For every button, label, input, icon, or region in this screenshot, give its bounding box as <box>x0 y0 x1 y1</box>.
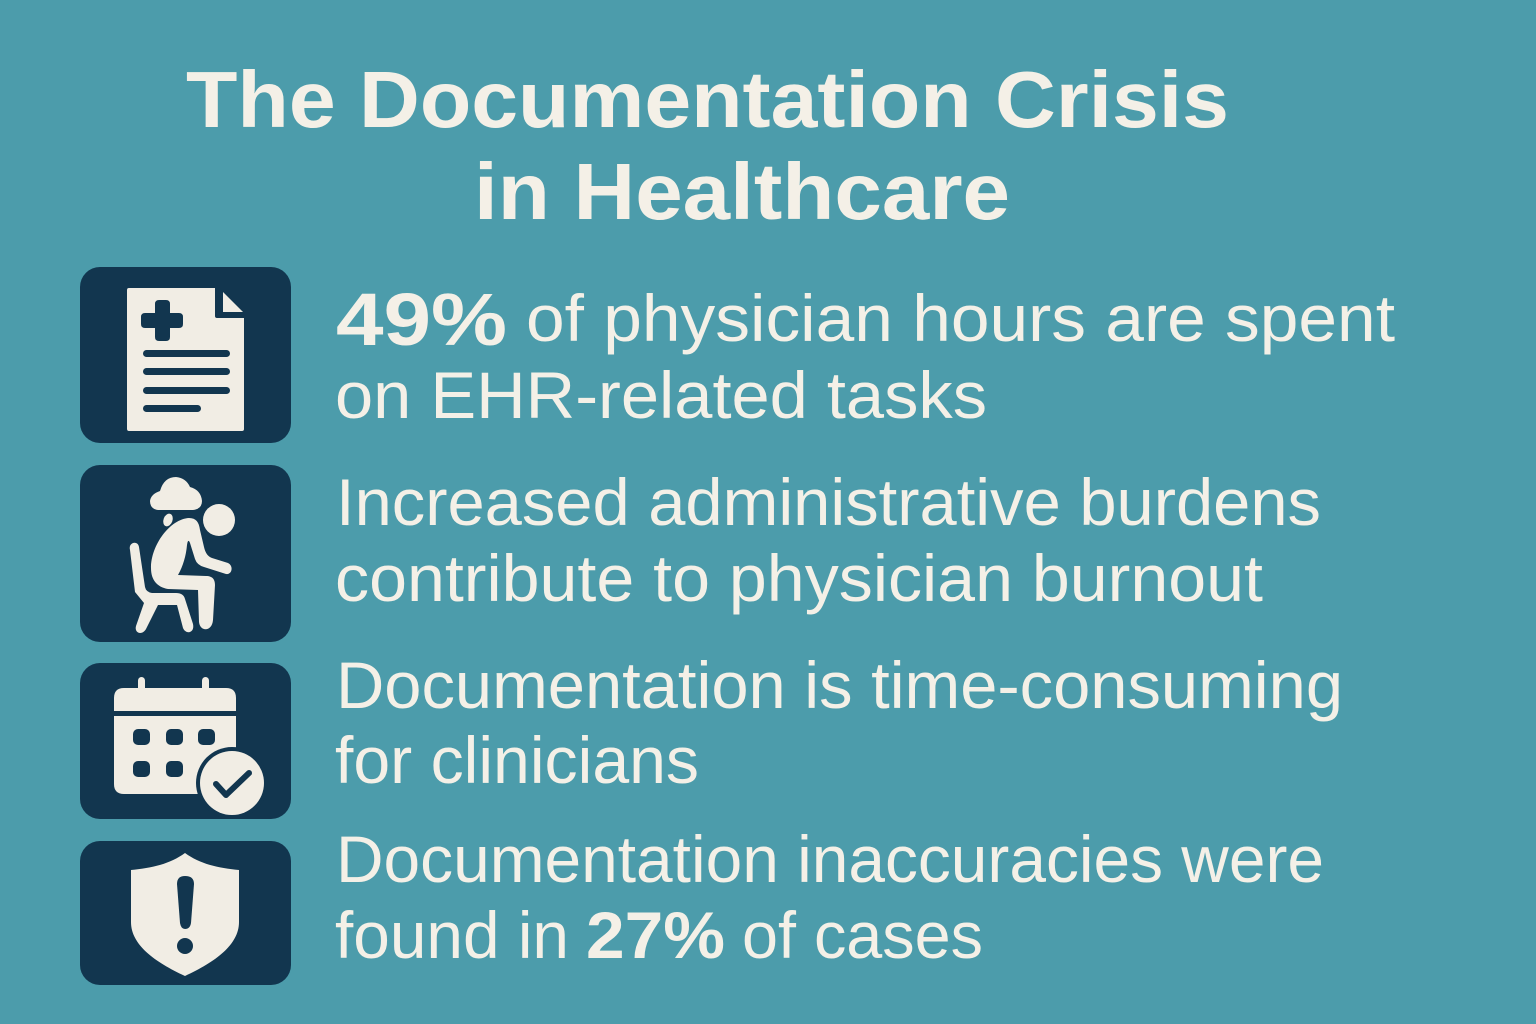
icon: medical document <box>80 267 291 443</box>
inaccuracies text: found in <box>335 898 569 972</box>
inaccuracies text: Documentation inaccuracies were <box>336 822 1324 896</box>
title: The Documentation Crisis <box>186 55 1229 144</box>
stat text: on EHR-related tasks <box>335 358 987 432</box>
stat text: of physician hours are spent <box>526 281 1395 355</box>
inaccuracies text <box>335 822 1324 972</box>
time text: for clinicians <box>335 723 699 797</box>
stat text <box>335 278 1395 432</box>
stat text: 49% <box>336 278 507 361</box>
burnout text <box>335 465 1321 615</box>
title <box>186 55 1229 236</box>
panel: inaccuracies <box>80 822 1324 985</box>
icon: calendar with check <box>80 663 291 819</box>
burnout text: contribute to physician burnout <box>335 541 1263 615</box>
time text <box>335 648 1343 797</box>
icon: exhausted seated person <box>80 465 291 642</box>
icon: shield with exclamation <box>80 841 291 985</box>
panel: time-consuming <box>80 648 1343 819</box>
burnout text: Increased administrative burdens <box>336 465 1321 539</box>
title: in Healthcare <box>474 147 1010 236</box>
inaccuracies text: of cases <box>742 898 983 972</box>
inaccuracies text: 27% <box>586 898 725 972</box>
panel: burnout <box>80 465 1321 642</box>
panel: EHR hours <box>80 267 1395 443</box>
time text: Documentation is time-consuming <box>336 648 1343 722</box>
